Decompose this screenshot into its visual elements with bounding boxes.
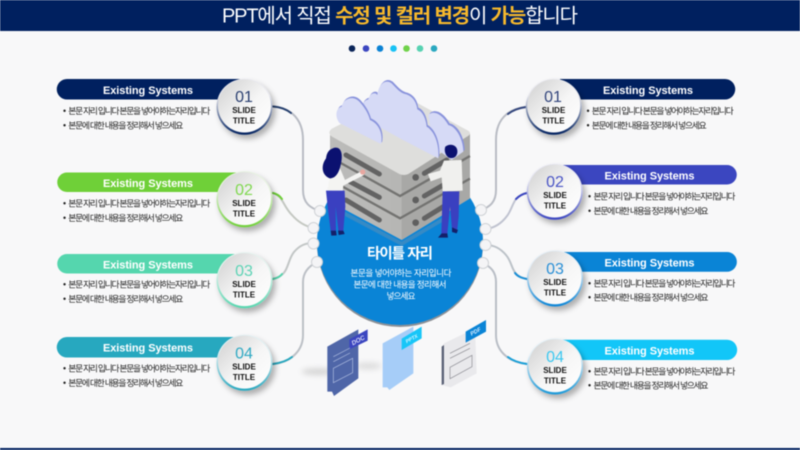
bullets: • xyxy=(63,120,66,130)
center body text: 본문에 대한 내용을 정리해서 xyxy=(354,280,446,290)
number badge: SLIDE xyxy=(543,366,567,375)
number badge xyxy=(216,252,272,308)
icon: PPTX file xyxy=(383,327,422,390)
server stack xyxy=(329,95,470,246)
number badge: SLIDE xyxy=(232,106,256,115)
panel: right 01 xyxy=(526,79,735,135)
bullets: • xyxy=(63,106,66,116)
bullets: • xyxy=(63,378,66,388)
bullets: • xyxy=(63,198,66,208)
bullets: 본문에 대한 내용을 정리해서 넣으세요 xyxy=(592,120,707,130)
bullets xyxy=(63,198,210,223)
connector nodes xyxy=(308,204,491,268)
number badge: TITLE xyxy=(233,117,256,126)
number badge: TITLE xyxy=(233,210,256,218)
number badge: SLIDE xyxy=(232,280,256,289)
bullets xyxy=(63,364,210,388)
number badge: 03 xyxy=(235,263,253,280)
bullets: • xyxy=(63,280,66,290)
heading: Existing Systems xyxy=(103,85,193,97)
header pill xyxy=(560,79,735,100)
header bar xyxy=(0,0,800,31)
colour dots xyxy=(349,45,437,52)
heading: Existing Systems xyxy=(103,342,193,354)
number badge xyxy=(216,335,272,391)
cloud xyxy=(336,80,465,160)
bullets: • xyxy=(63,294,66,304)
number badge: TITLE xyxy=(542,117,565,126)
bullets: 본문에 대한 내용을 정리해서 넣으세요 xyxy=(594,206,708,216)
bullets: • xyxy=(586,120,590,130)
center body text: 본문을 넣어야하는 자리입니다 xyxy=(350,268,452,278)
icon: DOC file: DOC xyxy=(351,334,367,347)
header pill xyxy=(562,340,737,360)
bullets xyxy=(63,280,210,304)
bullets: • xyxy=(588,278,591,288)
number badge: 01 xyxy=(544,89,562,106)
bullets: 본문 자리 입니다 본문을 넣어야하는자리입니다 xyxy=(68,280,210,290)
number badge: TITLE xyxy=(233,290,256,300)
header pill xyxy=(57,172,240,192)
title: PPT에서 직접 수정 및 컬러 변경이 가능합니다 xyxy=(222,4,578,28)
number badge xyxy=(216,79,272,135)
bullets: 본문 자리 입니다 본문을 넣어야하는자리입니다 xyxy=(68,106,210,116)
number badge: 04 xyxy=(546,349,564,366)
number badge: TITLE xyxy=(233,373,256,382)
bullets: 본문에 대한 내용을 정리해서 넣으세요 xyxy=(68,378,183,388)
bullets: 본문에 대한 내용을 정리해서 넣으세요 xyxy=(68,294,183,304)
number badge: TITLE xyxy=(544,288,567,298)
number badge xyxy=(527,164,583,220)
heading: Existing Systems xyxy=(604,346,694,358)
bullets: • xyxy=(586,106,590,116)
document icons xyxy=(302,320,486,396)
bullets xyxy=(63,106,210,130)
panel: left 04 xyxy=(57,335,272,391)
icon: PDF file xyxy=(442,320,486,387)
number badge: 03 xyxy=(546,261,564,278)
bullets: • xyxy=(588,380,591,390)
person right xyxy=(428,145,463,238)
bullets: 본문에 대한 내용을 정리해서 넣으세요 xyxy=(68,213,183,223)
number badge: SLIDE xyxy=(543,191,567,200)
number badge xyxy=(526,79,582,135)
center disc xyxy=(317,159,483,327)
bullets: 본문 자리 입니다 본문을 넣어야하는자리입니다 xyxy=(594,192,736,202)
header pill xyxy=(562,165,737,184)
bullets: 본문에 대한 내용을 정리해서 넣으세요 xyxy=(68,120,183,130)
bullets xyxy=(588,278,736,302)
bullets: 본문 자리 입니다 본문을 넣어야하는자리입니다 xyxy=(594,278,736,288)
heading: Existing Systems xyxy=(103,260,193,272)
bullets: 본문 자리 입니다 본문을 넣어야하는자리입니다 xyxy=(592,106,734,116)
panel: left 02 xyxy=(57,171,273,227)
bullets: 본문 자리 입니다 본문을 넣어야하는자리입니다 xyxy=(68,198,210,208)
number badge: 04 xyxy=(235,346,253,362)
number badge xyxy=(527,250,583,306)
center body text: 넣으세요 xyxy=(386,291,416,301)
center body text xyxy=(350,268,452,301)
heading: Existing Systems xyxy=(103,178,193,190)
bullets: • xyxy=(588,292,591,302)
heading: Existing Systems xyxy=(603,85,693,97)
number badge: TITLE xyxy=(544,376,567,386)
bullets: 본문에 대한 내용을 정리해서 넣으세요 xyxy=(594,292,708,302)
number badge: 02 xyxy=(235,182,253,199)
bullets: • xyxy=(63,364,66,374)
number badge: SLIDE xyxy=(543,278,567,287)
bullets: 본문 자리 입니다 본문을 넣어야하는자리입니다 xyxy=(594,366,736,376)
panel: left 03 xyxy=(57,252,273,308)
footer line xyxy=(0,448,800,450)
header pill xyxy=(57,79,240,100)
header pill xyxy=(57,337,240,358)
bullets: 본문 자리 입니다 본문을 넣어야하는자리입니다 xyxy=(68,364,210,374)
number badge: 01 xyxy=(235,89,253,106)
number badge: 02 xyxy=(546,174,564,191)
bullets: • xyxy=(588,206,591,216)
bullets xyxy=(586,106,734,130)
bullets: 본문에 대한 내용을 정리해서 넣으세요 xyxy=(594,380,708,390)
server illustration with cloud and people xyxy=(323,80,470,246)
panel: right 03 xyxy=(527,250,737,306)
panel: left 01 xyxy=(57,79,272,135)
center title: 타이틀 자리 xyxy=(367,246,433,262)
heading: Existing Systems xyxy=(604,170,694,182)
bullets xyxy=(588,192,736,216)
header pill xyxy=(57,254,240,274)
icon: PPTX file: PPTX xyxy=(405,333,420,345)
bullets: • xyxy=(588,366,591,376)
number badge: SLIDE xyxy=(232,362,256,372)
person left xyxy=(323,148,365,236)
header pill xyxy=(562,252,737,272)
icon: DOC file xyxy=(327,329,368,396)
icon: PDF file: PDF xyxy=(470,327,483,338)
panel: right 04 xyxy=(527,338,737,394)
number badge xyxy=(216,171,272,227)
number badge: SLIDE xyxy=(232,199,256,208)
connector lines xyxy=(273,106,527,364)
bullets: • xyxy=(63,213,66,223)
number badge: SLIDE xyxy=(542,106,566,115)
bullets: • xyxy=(588,192,591,202)
number badge: TITLE xyxy=(544,202,567,211)
bullets xyxy=(588,366,736,390)
heading: Existing Systems xyxy=(604,258,694,270)
panel: right 02 xyxy=(527,164,737,220)
number badge xyxy=(527,338,583,394)
